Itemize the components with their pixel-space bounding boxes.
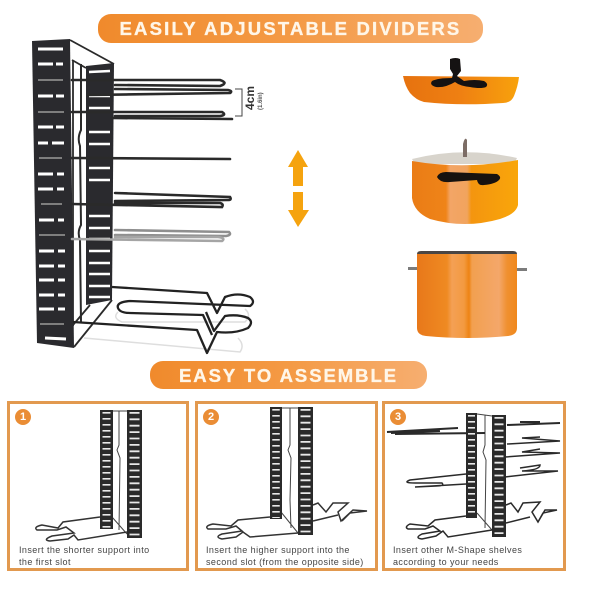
step 2 caption: Insert the higher support into the [206, 545, 350, 555]
section banner: easy to assemble: EASY TO ASSEMBLE [179, 365, 398, 386]
step 3 caption: according to your needs [393, 556, 499, 566]
step 3 caption: Insert other M-Shape shelves [393, 545, 522, 555]
measurement bracket: 4cm spacing: 4cm [243, 86, 257, 110]
cookware: pan and pots [403, 58, 527, 338]
frying pan [403, 58, 519, 104]
step 1 caption [19, 545, 150, 566]
section banner: easy to assemble [150, 361, 427, 389]
rack floor shadow [84, 309, 248, 352]
title banner: easily adjustable dividers [98, 14, 483, 43]
rack front panel [32, 39, 74, 348]
step 3 rack [387, 413, 560, 539]
main illustration: adjustable pan rack [32, 39, 264, 354]
rack rear panel [86, 63, 114, 305]
step panel 2 [195, 401, 378, 571]
step 3 caption [393, 545, 522, 567]
double arrow: adjust up and down [288, 150, 309, 227]
step illustrations [35, 407, 560, 542]
step number 2: 2 [208, 411, 214, 423]
measurement bracket: 4cm spacing: (1.6in) [258, 92, 264, 110]
shelf: base M-shape prongs [73, 287, 253, 353]
step 1 caption: the first slot [19, 556, 71, 566]
measurement bracket: 4cm spacing [235, 86, 264, 116]
title banner: easily adjustable dividers: EASILY ADJUSTABLE DIVIDERS [120, 18, 461, 39]
tall stock pot [408, 251, 527, 338]
step 2 caption [206, 545, 364, 567]
arrow down [288, 192, 309, 227]
medium pot with lid [412, 139, 518, 224]
step number 3 [390, 409, 406, 425]
step number 2 [203, 409, 219, 425]
rack back frame rails [70, 40, 114, 347]
step 1 caption: Insert the shorter support into [19, 545, 150, 555]
step number 1 [15, 409, 31, 425]
arrow up [288, 150, 308, 186]
step 2 rack [207, 407, 367, 539]
step number 1: 1 [20, 411, 26, 423]
step 2 caption: second slot (from the opposite side) [206, 556, 364, 566]
step panel 1 [7, 401, 189, 571]
step panel 3 [382, 401, 566, 571]
step number 3: 3 [395, 411, 401, 423]
step 1 rack [36, 410, 142, 541]
shelves: upper five prongs [72, 80, 232, 241]
